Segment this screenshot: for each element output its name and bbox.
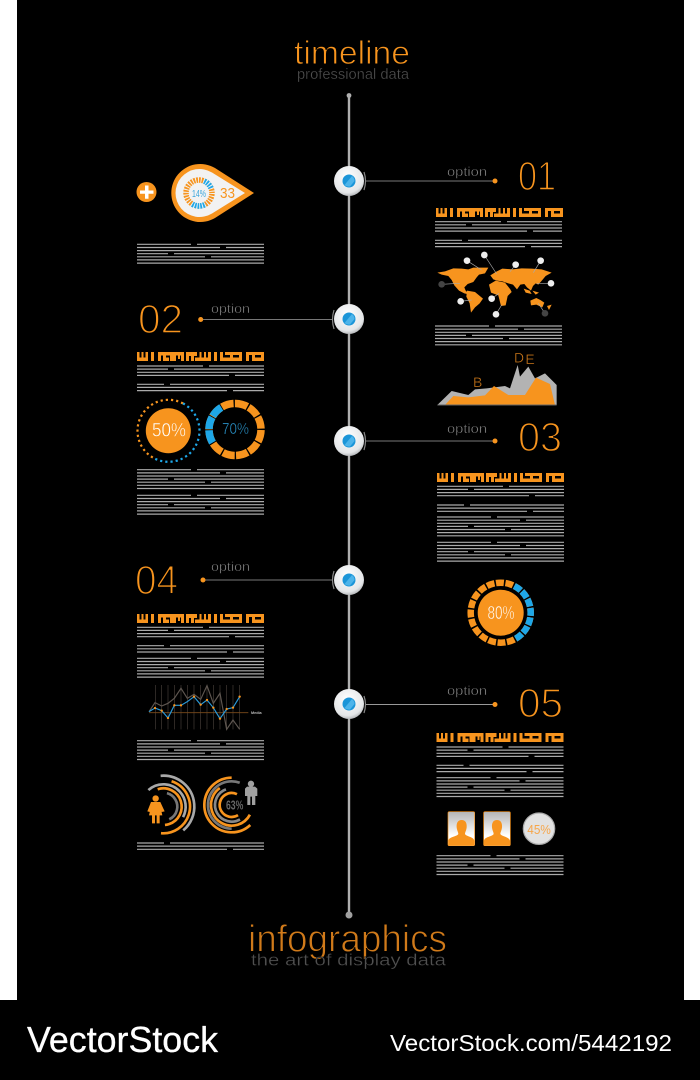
concentric arcs with 63% and man icon xyxy=(193,766,270,844)
step 03 connector and heading: 03 xyxy=(518,414,562,460)
text block xyxy=(137,495,264,514)
step 02 connector and heading: 02 xyxy=(138,296,183,342)
step 05 connector and heading xyxy=(364,680,563,726)
step 05 header pattern xyxy=(436,733,564,742)
node 03 xyxy=(334,426,364,456)
area chart xyxy=(437,349,557,405)
watermark url: VectorStock.com/5442192 xyxy=(390,1030,672,1056)
node 05 xyxy=(334,689,364,719)
step 03 connector and heading xyxy=(364,414,562,460)
subtitle: professional data xyxy=(297,66,410,83)
text block xyxy=(137,470,264,488)
donut 70% xyxy=(200,394,270,465)
watermark band xyxy=(0,1000,700,1080)
step 04 text xyxy=(137,627,264,677)
step 03 header pattern xyxy=(437,473,564,482)
pin icon with 14% and 33: 14% xyxy=(192,189,206,200)
pin icon with 14% and 33: 33 xyxy=(220,185,235,202)
area chart: E xyxy=(525,351,535,367)
percentage badge 45%: 45% xyxy=(527,822,551,837)
text block xyxy=(137,843,264,849)
text block xyxy=(436,856,564,874)
step 03 connector and heading: option xyxy=(447,421,487,436)
step 04 connector and heading: option xyxy=(211,559,250,574)
step 02 connector and heading xyxy=(138,296,334,342)
area chart: B xyxy=(473,374,482,390)
text block xyxy=(137,741,264,760)
profile card 1 xyxy=(448,812,475,846)
footer subtitle: the art of display data xyxy=(251,950,447,970)
step 02 connector and heading: option xyxy=(211,301,250,316)
text block xyxy=(137,244,264,263)
donut 70%: 70% xyxy=(222,421,249,438)
step 02 text xyxy=(137,366,264,391)
percentage badge 45% xyxy=(523,813,555,844)
step 04 connector and heading: 04 xyxy=(135,557,178,603)
timeline spine xyxy=(346,93,352,919)
donut 50% xyxy=(137,400,200,462)
step 05 text xyxy=(436,747,564,796)
footer title: infographics xyxy=(248,918,447,960)
profile card 2 xyxy=(484,812,510,846)
world map xyxy=(437,252,554,318)
concentric arcs with 63% and man icon: 63% xyxy=(226,798,243,812)
donut 50%: 50% xyxy=(152,420,186,442)
donut 80%: 80% xyxy=(488,603,514,623)
plus icon xyxy=(136,182,156,202)
area chart: D xyxy=(514,349,524,365)
concentric arcs with woman icon xyxy=(130,773,197,840)
pin icon with 14% and 33 xyxy=(171,164,254,222)
step 01 connector and heading: 01 xyxy=(518,153,556,199)
step 01 header pattern xyxy=(436,208,563,217)
line chart: Media xyxy=(251,711,263,715)
step 03 text xyxy=(437,486,564,561)
step 04 connector and heading xyxy=(135,557,334,603)
node 04 xyxy=(334,565,364,595)
text block xyxy=(435,326,562,345)
step 01 connector and heading: option xyxy=(447,164,487,179)
step 02 header pattern xyxy=(137,352,264,361)
step 01 connector and heading xyxy=(364,153,556,199)
step 05 connector and heading: option xyxy=(447,683,487,698)
title: timeline xyxy=(294,34,410,71)
step 05 connector and heading: 05 xyxy=(518,680,563,726)
line chart xyxy=(149,685,263,729)
donut 80% xyxy=(460,572,541,653)
watermark logo text: VectorStock xyxy=(27,1019,219,1060)
node 01 xyxy=(334,166,364,196)
node 02 xyxy=(334,304,364,334)
step 04 header pattern xyxy=(137,614,264,623)
step 01 text xyxy=(435,222,562,247)
